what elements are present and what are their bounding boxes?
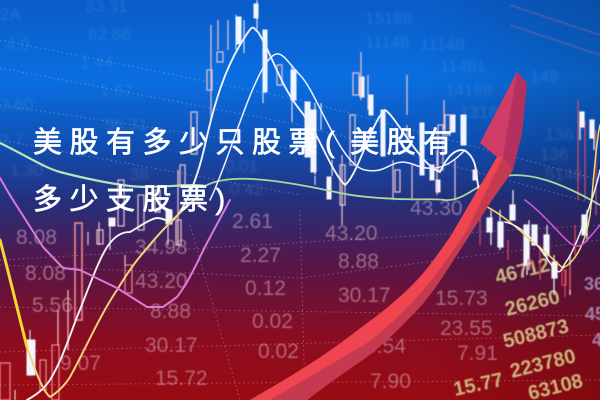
faint table numbers upper: 14188 (445, 81, 492, 100)
table numbers lower right (451, 254, 585, 400)
table numbers lower left: 15.72 (155, 367, 208, 390)
table numbers lower left: 7.91 (457, 342, 498, 365)
table numbers lower left: 2.61 (232, 210, 273, 233)
faint table numbers upper: 0.42 (230, 180, 263, 199)
outlined and pink candles (0, 20, 455, 400)
faint table numbers upper: 148 (530, 67, 558, 86)
faint table numbers upper: 11481 (440, 57, 486, 76)
table numbers lower left: 7.90 (370, 370, 411, 393)
arrow head (480, 72, 527, 170)
faint table numbers upper: 136 (540, 145, 568, 164)
faint table numbers upper: 1.44 (80, 53, 113, 72)
white filled candles (15, 0, 477, 400)
faint table numbers upper (0, 0, 583, 199)
table numbers lower left: 0.12 (245, 277, 286, 300)
right candle cluster (480, 100, 596, 297)
table numbers lower right: 223780 (508, 345, 578, 383)
icon: red rising arrow (250, 72, 527, 400)
faint table numbers upper: 11148 (365, 33, 410, 52)
right average lines (483, 125, 600, 268)
faint table numbers upper: 96.31 (105, 115, 148, 134)
table numbers lower left: 8.08 (25, 262, 66, 285)
table numbers lower left: 30.17 (145, 334, 198, 357)
faint table numbers upper: 5148 (545, 165, 583, 184)
table numbers lower left: 8.88 (150, 300, 191, 323)
table numbers lower left: 43.30 (410, 197, 463, 220)
table numbers lower right: 508873 (501, 315, 571, 353)
green average line left (0, 143, 205, 187)
table numbers lower left: 0.02 (252, 310, 293, 333)
arrow shaft (250, 157, 513, 400)
table numbers lower left (16, 197, 498, 393)
table numbers lower left: 5.56 (32, 294, 73, 317)
faint table numbers upper: 4.0 (6, 35, 30, 54)
table numbers lower left: 15.73 (435, 287, 488, 310)
faint table numbers upper: 15188 (365, 9, 412, 28)
table numbers lower right: 26260 (503, 286, 562, 321)
faint table numbers upper: 13188 (460, 103, 507, 122)
table numbers lower left: 8.08 (16, 226, 57, 249)
green average line right (205, 175, 600, 205)
table numbers lower left: 0.02 (258, 340, 299, 363)
table numbers lower left: 9.07 (60, 352, 101, 375)
faint table numbers upper: 11148 (420, 35, 465, 54)
yellow average line (27, 195, 200, 397)
table numbers lower left: 34.98 (135, 236, 188, 259)
arrow shaft lower shade (270, 157, 513, 400)
magenta average line (0, 178, 230, 307)
faint table numbers upper: 1.67 (100, 81, 133, 100)
table numbers lower left: 23.55 (440, 317, 493, 340)
table numbers lower left: 8.88 (338, 250, 379, 273)
title line 2: 多少支股票) (33, 184, 233, 216)
table numbers lower right: 15.77 (451, 369, 505, 400)
faint table numbers upper: 2A (0, 5, 21, 24)
faint table numbers upper: 1.30 (10, 161, 43, 180)
faint table numbers upper: 136 (545, 125, 573, 144)
table numbers lower left: 43.20 (325, 222, 378, 245)
faint table numbers upper: 3.60 (0, 95, 33, 114)
table numbers lower right: 46712 (493, 254, 552, 289)
faint table numbers upper: 62.66 (88, 25, 131, 44)
title line 1: 美股有多少只股票( 美股有 (33, 127, 460, 159)
table numbers lower left: 30.17 (338, 284, 391, 307)
faint table numbers upper: 38 (130, 165, 149, 184)
faint table numbers upper: 2.7 (0, 130, 24, 149)
white average line tall (27, 28, 480, 400)
table numbers lower left: 5.54 (365, 335, 406, 358)
thin white average line (210, 54, 465, 200)
faint streaks top right (510, 5, 600, 55)
table numbers lower left: 2.27 (240, 244, 281, 267)
faint table numbers upper: 0.01 (225, 157, 258, 176)
table numbers lower left: 43.20 (135, 270, 188, 293)
